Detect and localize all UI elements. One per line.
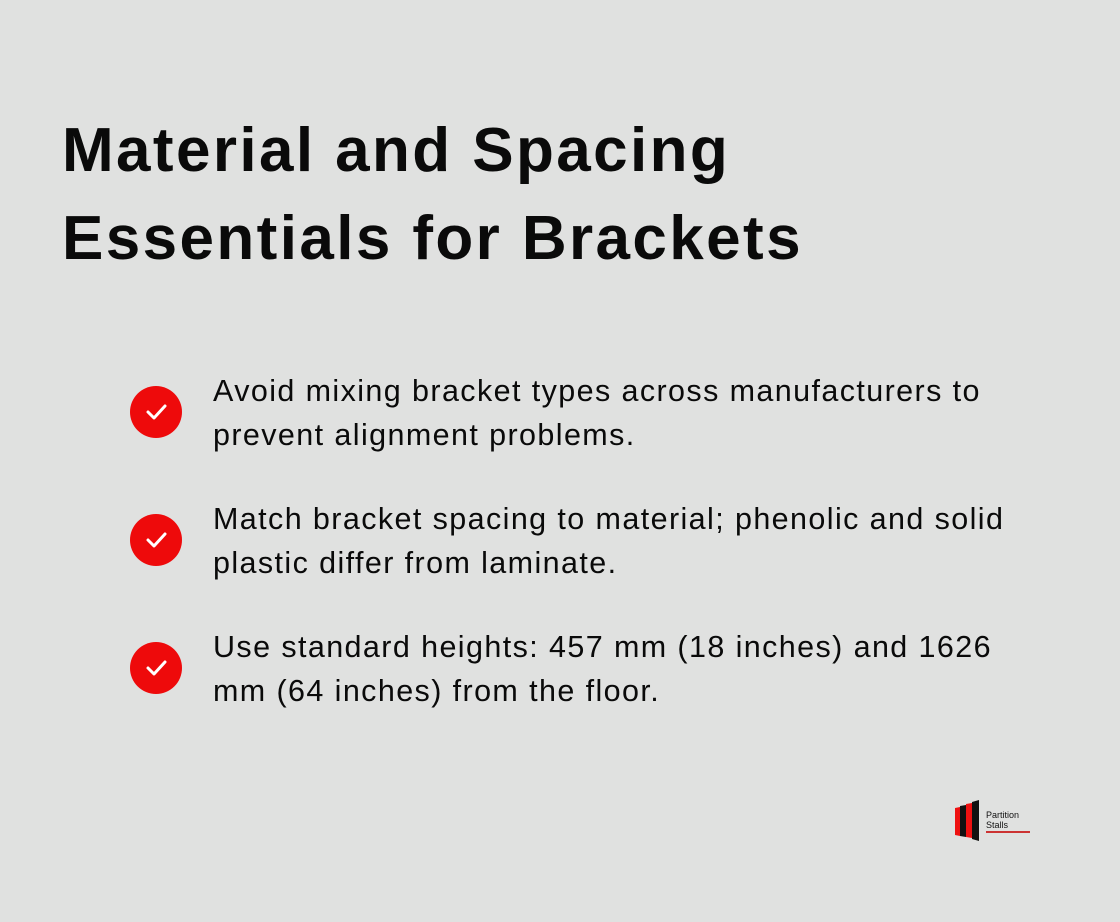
text: mm (64 inches) from the floor. xyxy=(213,674,660,708)
icon: check xyxy=(130,642,182,694)
item 1 xyxy=(130,374,981,452)
logo xyxy=(955,800,1030,841)
text: Avoid mixing bracket types across manufacturers to xyxy=(213,374,981,408)
logo: Stalls xyxy=(986,820,1008,830)
item 3 xyxy=(130,630,992,708)
title: Material and Spacing xyxy=(62,116,730,185)
text xyxy=(213,374,981,452)
item 2 xyxy=(130,502,1004,580)
text: Use standard heights: 457 mm (18 inches) and 1626 xyxy=(213,630,992,664)
icon: check xyxy=(130,514,182,566)
title xyxy=(62,116,803,273)
text: Match bracket spacing to material; phenolic and solid xyxy=(213,502,1004,536)
logo: Partition xyxy=(986,810,1019,820)
text xyxy=(213,502,1004,580)
text xyxy=(213,630,992,708)
text: prevent alignment problems. xyxy=(213,418,636,452)
text: plastic differ from laminate. xyxy=(213,546,618,580)
title: Essentials for Brackets xyxy=(62,204,803,273)
icon: check xyxy=(130,386,182,438)
